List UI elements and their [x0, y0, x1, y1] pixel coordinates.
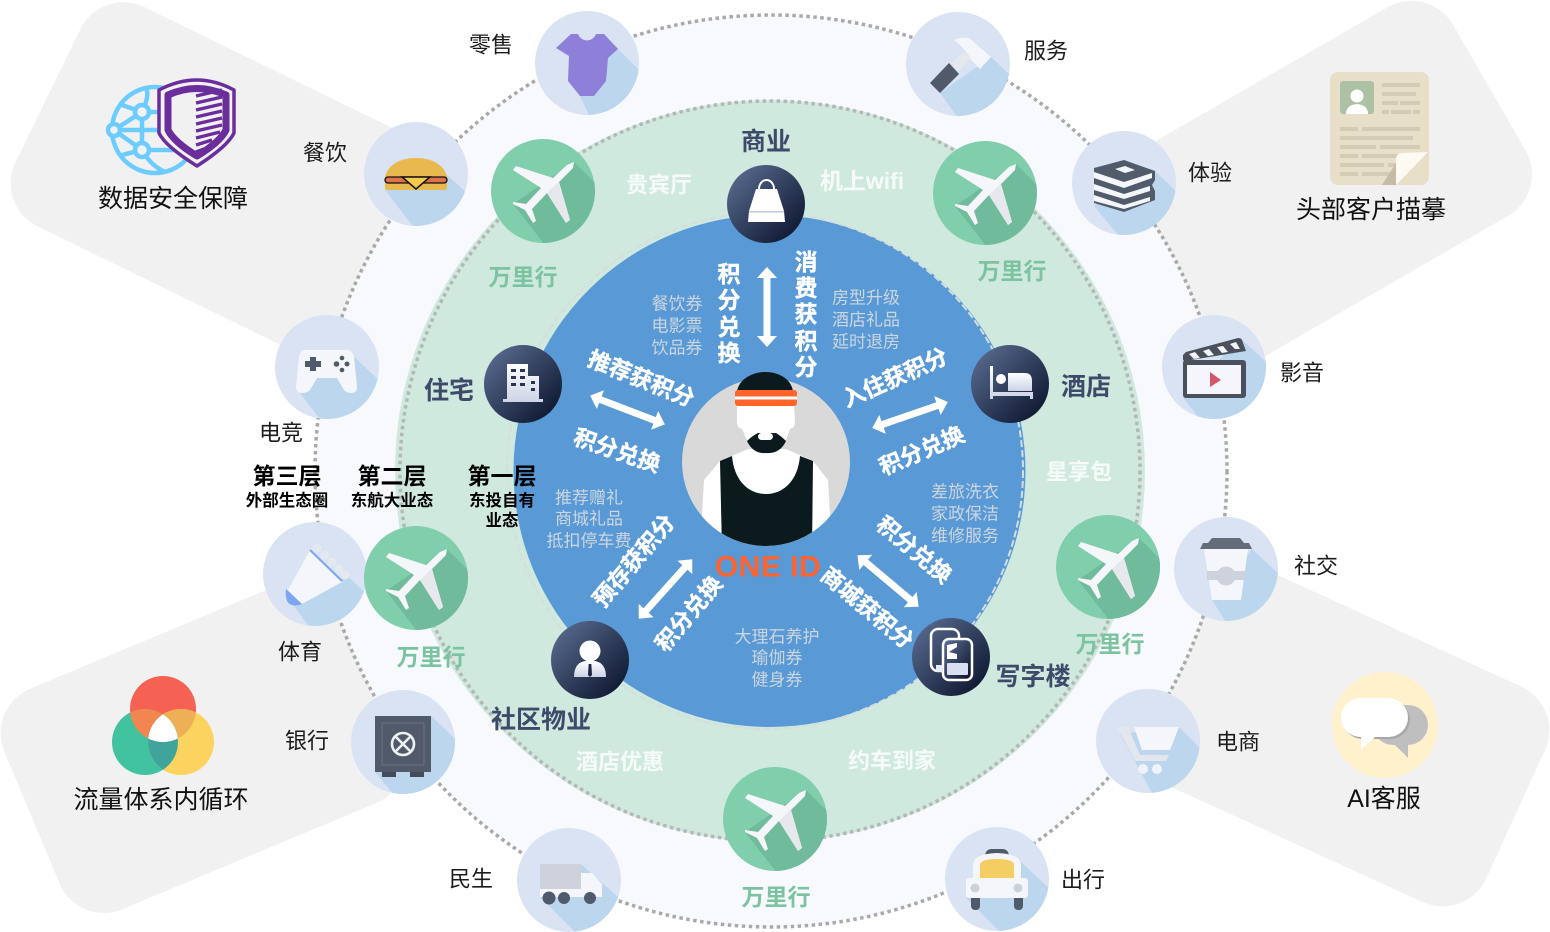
arrow: hotel exchange: [869, 393, 951, 437]
layer heading: third: 外部生态圈: [246, 490, 328, 510]
text: home services: [931, 482, 999, 546]
icon: office documents: [912, 618, 990, 696]
arrow: residential exchange: [587, 386, 668, 434]
text: home services: 差旅洗衣: [931, 482, 999, 502]
label: plane top right: 万里行: [978, 258, 1046, 284]
icon: bank safe: [351, 690, 455, 794]
vertical label: points exchange: 兑: [718, 314, 740, 340]
icon: service hammer: [906, 12, 1010, 116]
person avatar: [682, 372, 850, 550]
icon: globe and shield: [108, 80, 234, 173]
rotated label: referral points: 推荐获积分: [584, 346, 698, 412]
label: plane top left: 万里行: [488, 264, 558, 290]
text: home services: 家政保洁: [931, 504, 999, 524]
icon: venn diagram: [112, 676, 214, 775]
text: residential benefits: 抵扣停车费: [546, 532, 632, 550]
vertical label: points exchange: 换: [718, 340, 740, 366]
text: residential benefits: 推荐赠礼: [555, 488, 623, 508]
layer heading: first: [468, 463, 536, 530]
label: service: 服务: [1024, 38, 1068, 64]
rotated label: stay points: 入住获积分: [839, 344, 951, 412]
icon: customer profile sheet: [1330, 72, 1429, 185]
icon: retail t-shirt: [535, 11, 639, 115]
label: experience: 体验: [1188, 160, 1232, 186]
layer heading: second: 第二层: [358, 463, 426, 489]
icon: plane top left: [491, 139, 633, 281]
title: ONE ID: ONE ID: [715, 550, 821, 584]
icon: social coffee cup: [1174, 517, 1278, 621]
icon: travel taxi: [945, 827, 1049, 931]
label: commerce: 商业: [741, 128, 791, 156]
text: community vouchers: [734, 628, 820, 690]
label: dining: 餐饮: [303, 140, 347, 166]
label: office building: 写字楼: [995, 663, 1071, 691]
middle ring: second layer: [395, 100, 1145, 842]
icon: media clapperboard: [1162, 315, 1266, 419]
label: social: 社交: [1294, 554, 1338, 578]
rotated label: hotel exchange: 积分兑换: [876, 422, 969, 480]
rotated label: office exchange: 积分兑换: [871, 511, 957, 589]
layer heading: second: 东航大业态: [351, 490, 434, 510]
label: star pack: 星享包: [1046, 460, 1112, 484]
text: hotel benefits: [832, 288, 900, 352]
vertical label: consume to earn: 费: [794, 275, 818, 301]
layer heading: third: 第三层: [252, 463, 322, 489]
icon: plane bottom: [723, 767, 865, 909]
heading: traffic loop: 流量体系内循环: [73, 786, 249, 814]
icon: gaming controller: [275, 315, 379, 419]
label: plane left: 万里行: [396, 644, 466, 670]
layer heading: first: 业态: [486, 510, 519, 530]
icon: residential building: [484, 345, 562, 423]
vertical label: consume to earn: 积: [794, 328, 818, 354]
icon: sports shuttlecock: [263, 522, 366, 626]
text: hotel benefits: 延时退房: [832, 332, 900, 352]
text: community vouchers: 大理石养护: [734, 628, 820, 646]
icon: e-commerce cart: [1096, 689, 1200, 793]
heading: top customer portrait: 头部客户描摹: [1296, 196, 1446, 224]
text: commerce vouchers: 电影票: [652, 316, 702, 336]
layer heading: third: [246, 463, 328, 510]
label: livelihood: 民生: [449, 866, 493, 892]
label: sports: 体育: [278, 640, 322, 664]
text: residential benefits: [546, 488, 632, 550]
inner disc: first layer: [514, 215, 1026, 727]
heading: AI customer service: AI客服: [1347, 785, 1421, 813]
middle ring dotted border: [400, 101, 1140, 841]
layer heading: second: [351, 463, 434, 510]
label: plane bottom: 万里行: [742, 884, 810, 910]
panel: AI customer service band: [1007, 496, 1550, 922]
label: bank: 银行: [285, 728, 329, 754]
rotated label: residential exchange: 积分兑换: [570, 425, 664, 478]
icon: plane right: [1056, 515, 1198, 657]
icon: hotel bed: [971, 345, 1049, 423]
text: residential benefits: 商城礼品: [555, 510, 623, 528]
vertical label: consume to earn: 获: [794, 301, 818, 327]
text: community vouchers: 健身券: [752, 670, 802, 690]
layer heading: first: 第一层: [468, 463, 536, 489]
rotated label: deposit points: 预存获积分: [588, 510, 680, 612]
label: community property: 社区物业: [491, 706, 591, 734]
vertical label: points exchange: 积: [718, 261, 740, 287]
icon: experience books: [1072, 131, 1176, 235]
rotated label: community exchange: 积分兑换: [650, 571, 728, 657]
arrow: community exchange: [631, 553, 700, 625]
icon: community person: [551, 621, 629, 699]
icon: plane top right: [933, 141, 1075, 283]
layer heading: first: 东投自有: [469, 490, 535, 510]
text: community vouchers: 瑜伽券: [752, 648, 802, 668]
label: hotel discount: 酒店优惠: [576, 750, 664, 774]
vertical label: consume to earn: 分: [794, 354, 818, 380]
icon: dining burger: [364, 122, 468, 226]
text: home services: 维修服务: [931, 526, 999, 546]
panel: top customer portrait band: [992, 0, 1550, 444]
vertical label: points exchange: [718, 261, 740, 366]
label: retail: 零售: [469, 32, 513, 58]
arrow: vertical exchange: [757, 267, 777, 347]
vertical label: points exchange: 分: [718, 287, 740, 313]
label: ride hailing: 约车到家: [848, 748, 936, 774]
label: media: 影音: [1280, 360, 1324, 386]
arrow: office exchange: [851, 548, 925, 614]
icon: AI chat bubbles: [1332, 672, 1438, 778]
text: hotel benefits: 酒店礼品: [832, 310, 900, 330]
label: in-flight wifi: 机上wifi: [820, 168, 904, 194]
outer ring: third layer: [315, 15, 1227, 927]
vertical label: consume to earn: 消: [794, 249, 818, 275]
label: e-commerce: 电商: [1216, 730, 1260, 754]
inner disc dashed border: [507, 213, 1023, 729]
text: commerce vouchers: 饮品券: [652, 338, 702, 358]
text: hotel benefits: 房型升级: [832, 288, 900, 308]
rotated label: mall points: 商城获积分: [816, 561, 919, 654]
label: travel: 出行: [1061, 868, 1105, 892]
icon: livelihood truck: [517, 828, 621, 932]
icon: commerce shopping bag: [727, 165, 805, 243]
text: commerce vouchers: [652, 294, 702, 358]
label: plane right: 万里行: [1076, 631, 1144, 657]
panel: traffic loop band: [0, 564, 420, 928]
heading: data security: 数据安全保障: [98, 185, 248, 213]
text: commerce vouchers: 餐饮券: [652, 294, 702, 314]
panel: data security band: [0, 0, 549, 424]
vertical label: consume to earn: [794, 249, 818, 380]
label: gaming: 电竞: [259, 420, 303, 446]
icon: plane left: [364, 526, 506, 668]
label: VIP lounge: 贵宾厅: [626, 172, 692, 198]
label: hotel: 酒店: [1061, 373, 1111, 401]
label: residential: 住宅: [424, 376, 474, 405]
